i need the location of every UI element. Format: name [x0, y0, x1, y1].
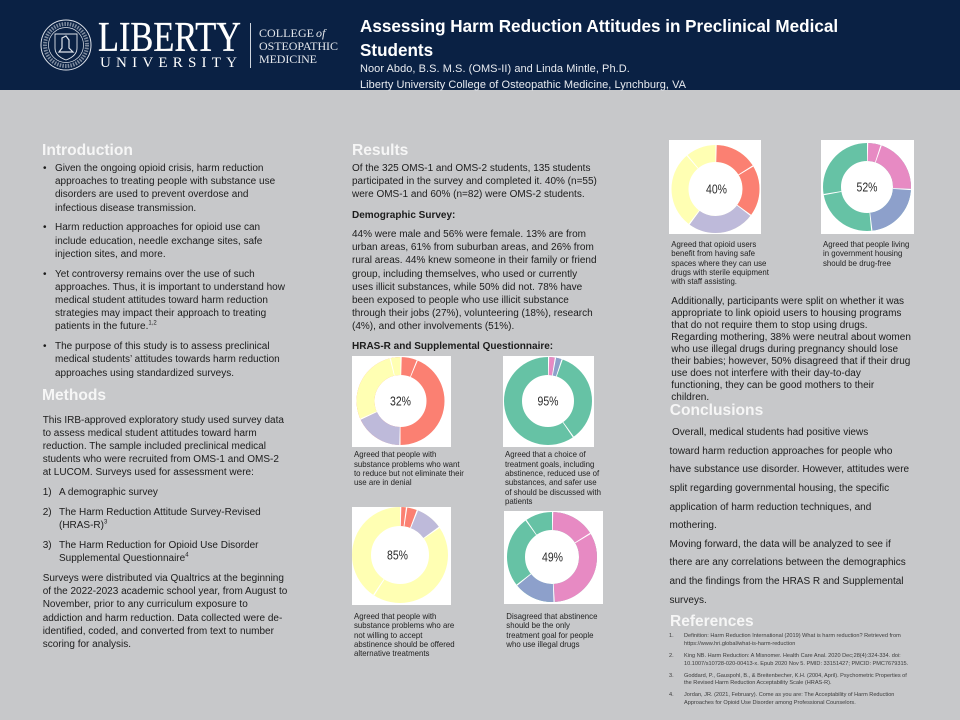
text block: references: 10.1007/s10728-020-00413-x. Epub 2020 Nov 5. PMID: 33151427; PMCID: PMC7679315. — [684, 661, 908, 667]
text block: methods: The Harm Reduction for Opioid Use Disorder — [59, 540, 259, 551]
caption: 32% chart — [354, 450, 464, 487]
text block: references — [669, 633, 908, 706]
poster title — [360, 17, 838, 60]
text block: methods: students who were recruited from OMS-1 and OMS-2 — [43, 454, 279, 465]
donut chart: 85%: 85% — [387, 548, 408, 562]
text block: conclusions — [670, 427, 909, 606]
caption: 85% chart: not willing to accept — [354, 631, 422, 640]
text block: introduction bullets: Given the ongoing opioid crisis, harm reduction — [55, 163, 263, 174]
text block: additional results: Additionally, participants were split on whether it was — [671, 296, 904, 307]
caption: 49% chart: should be the only — [506, 621, 570, 630]
authors and affiliation: Noor Abdo, B.S. M.S. (OMS-II) and Linda Mintle, Ph.D. — [360, 63, 630, 75]
caption: 95% chart: substances, and safer use — [505, 478, 597, 487]
caption: 52% chart: in government housing — [823, 249, 902, 258]
text block: references: King NB. Harm Reduction: A Misnomer. Health Care Anal. 2020 Dec;28(4):324-334. doi: — [684, 653, 901, 659]
text block: demographic survey: 44% were male and 56% were female. 13% are from — [352, 229, 586, 240]
text block: methods: scoring for analysis. — [43, 639, 131, 650]
text block: conclusions: application of harm reduction techniques, and — [670, 502, 871, 512]
donut chart: 85% — [352, 507, 451, 605]
donut chart: 49%: 49% — [542, 550, 563, 564]
authors and affiliation: Liberty University College of Osteopathic Medicine, Lynchburg, VA — [360, 79, 686, 91]
text block: results summary: Of the 325 OMS-1 and OMS-2 students, 135 students — [352, 163, 590, 174]
logo: Liberty University College of Osteopathic Medicine: OSTEOPATHIC — [259, 39, 338, 53]
caption: 40% chart: with staff assisting. — [671, 277, 737, 286]
caption: 85% chart: abstinence should be offered — [354, 640, 455, 649]
text block: methods: reduction. The sample included preclinical medical — [43, 441, 266, 452]
text block: additional results: children. — [671, 392, 709, 403]
logo: Liberty University College of Osteopathic Medicine — [40, 15, 338, 71]
text block: introduction bullets: • — [43, 269, 47, 280]
text block: introduction bullets: approaches. Thus, it is important to understand how — [55, 282, 285, 293]
caption: 40% chart — [671, 240, 769, 286]
text block: introduction bullets: • — [43, 163, 47, 174]
text block: conclusions: split regarding governmental housing, the specific — [670, 483, 889, 494]
donut chart: 52%: 52% — [856, 180, 878, 194]
text block: demographic survey — [352, 229, 597, 332]
text block: results summary: were OMS-1 and 60% (n=82) were OMS-2 students. — [352, 189, 585, 200]
donut chart: 95% — [503, 356, 594, 447]
text block: demographic survey: uses illicit substances, while 50% did not. 78% have — [352, 282, 582, 293]
caption: 52% chart: should be drug-free — [823, 259, 891, 268]
caption: 40% chart: Agreed that opioid users — [671, 240, 756, 249]
caption: 95% chart — [505, 450, 601, 506]
text block: demographic survey: been exposed to people who use illicit substance — [352, 295, 569, 306]
text block: conclusions: Overall, medical students had positive views — [672, 427, 868, 438]
text block: conclusions: Moving forward, the data will be analyzed to see if — [670, 539, 891, 550]
logo: Liberty University College of Osteopathic Medicine: UNIVERSITY — [100, 55, 237, 71]
caption: 49% chart: who use illegal drugs — [506, 640, 580, 649]
authors and affiliation — [360, 63, 686, 91]
text block: conclusions: mothering. — [670, 520, 717, 531]
text block: methods: 3) — [43, 540, 52, 551]
text block: methods: of the 2022-2023 academic school year, from August to — [43, 586, 287, 597]
caption: 52% chart: Agreed that people living — [823, 240, 909, 249]
text block: demographic survey: urban areas, 61% from suburban areas, and 26% from — [352, 242, 594, 253]
text block: introduction bullets: medical student attitudes toward harm reduction — [55, 295, 268, 306]
caption: 32% chart: use are in denial — [354, 478, 412, 487]
subheading: Demographic Survey: Demographic Survey: — [352, 210, 455, 221]
logo: Liberty University College of Osteopathic Medicine: LIBERTY — [98, 15, 241, 61]
text block: references: https://www.hri.global/what-is-harm-reduction — [684, 641, 795, 647]
text block: additional results: their babies; however, 50% disagreed that if their drug — [671, 356, 910, 367]
caption: 49% chart: treatment goal for people — [506, 631, 594, 640]
caption: 85% chart — [354, 612, 455, 658]
text block: introduction bullets: injection sites, and more. — [55, 249, 166, 260]
text block: introduction bullets: patients in the future.1,2 — [55, 321, 157, 332]
caption: 85% chart: Agreed that people with — [354, 612, 436, 621]
text block: methods: Supplemental Questionnaire4 — [59, 553, 189, 564]
text block: references: the Revised Harm Reduction Acceptability Scale (HRAS-R). — [684, 680, 832, 686]
text block: demographic survey: rural areas. 44% knew someone in their family or friend — [352, 255, 597, 266]
text block: methods: addiction and harm reduction. Data collected were de- — [43, 612, 282, 624]
text block: introduction bullets: infectious disease transmission. — [55, 203, 196, 214]
text block: demographic survey: (4%), and other involvements (51%). — [352, 321, 514, 332]
poster title: Assessing Harm Reduction Attitudes in Preclinical Medical — [360, 17, 838, 36]
caption: 40% chart: benefit from having safe — [671, 249, 755, 258]
caption: 95% chart: of should be discussed with — [505, 488, 601, 497]
text block: introduction bullets: Yet controversy remains over the use of such — [55, 269, 255, 280]
donut chart: 32%: 32% — [390, 394, 411, 408]
text block: additional results: use does not interfere with their day-to-day — [671, 368, 861, 379]
caption: 52% chart — [823, 240, 909, 268]
text block: references: Goddard, P., Gauspohl, B., & Breitenbecher, K.H. (2004, April). Psychometric Properties of — [684, 672, 907, 678]
header banner — [0, 0, 960, 90]
text block: conclusions: and the findings from the HRAS R and Supplemental — [670, 576, 904, 587]
text block: methods: at LUCOM. Surveys used for assessment were: — [43, 467, 254, 478]
text block: conclusions: there are any correlations between the demographics — [670, 557, 906, 568]
text block: additional results: functioning, they can be good mothers to their — [671, 380, 874, 391]
text block: methods: identified, coded, and converted from text to number — [43, 626, 274, 637]
caption: 95% chart: Agreed that a choice of — [505, 450, 586, 459]
donut chart: 32% — [352, 356, 451, 447]
text block: methods: (HRAS-R)3 — [59, 520, 107, 531]
text block: introduction bullets: include education, needle exchange sites, safe — [55, 236, 262, 247]
text block: methods — [42, 414, 287, 650]
text block: conclusions: toward harm reduction approaches for people who — [670, 446, 892, 457]
heading: References: References — [670, 613, 754, 630]
caption: 32% chart: to reduce but not eliminate their — [354, 469, 464, 478]
donut chart: 40% — [669, 140, 761, 234]
subheading: HRAS-R and Supplemental Questionnaire: HRAS-R and Supplemental Questionnaire: — [352, 341, 553, 352]
logo: Liberty University College of Osteopathic Medicine: MEDICINE — [259, 52, 317, 66]
poster title: Students — [360, 41, 433, 60]
text block: results summary: participated in the survey and completed it. 40% (n=55) — [352, 176, 597, 187]
text block: methods: 2) — [43, 507, 52, 518]
text block: references: Definition: Harm Reduction International (2019) What is harm reduction? Retrieved from — [684, 633, 901, 639]
icon: university seal — [41, 20, 91, 70]
text block: methods: The Harm Reduction Attitude Survey-Revised — [59, 507, 261, 518]
text block: conclusions: have substance use disorder. However, attitudes were — [670, 464, 909, 475]
text block: references: Approaches for Opioid Use Disorder among Professional Counselors. — [684, 700, 856, 706]
text block: introduction bullets: • — [43, 341, 47, 352]
text block: methods: 1) — [43, 487, 52, 498]
caption: 95% chart: treatment goals, including — [505, 460, 594, 469]
text block: introduction bullets: approaches using standardized surveys. — [55, 368, 234, 379]
heading: Conclusions: Conclusions — [670, 402, 763, 419]
text block: references: 3. — [669, 672, 674, 678]
text block: introduction bullets: approaches to treating people with substance use — [55, 176, 275, 187]
text block: introduction bullets: disorders are used to prevent overdose and — [55, 189, 248, 200]
donut chart: 49% — [504, 511, 603, 604]
text block: results summary — [352, 163, 597, 200]
logo: Liberty University College of Osteopathic Medicine: of — [316, 26, 327, 40]
text block: introduction bullets: strategies may impact their approach to treating — [55, 308, 266, 319]
heading: Results: Results — [352, 142, 408, 159]
text block: demographic survey: group, including themselves, who used or currently — [352, 269, 577, 280]
text block: additional results — [671, 296, 911, 403]
text block: references: Jordan, JR. (2021, February). Come as you are: The Acceptability of Harm Reduction — [684, 692, 894, 698]
caption: 49% chart — [506, 612, 598, 649]
text block: methods: to assess medical student attitudes toward harm — [43, 428, 257, 439]
text block: conclusions: surveys. — [670, 595, 707, 606]
donut chart: 40%: 40% — [706, 182, 727, 196]
text block: methods: Surveys were distributed via Qualtrics at the beginning — [43, 573, 284, 584]
logo: Liberty University College of Osteopathic Medicine: COLLEGE — [259, 26, 314, 40]
donut chart: 95%: 95% — [538, 394, 559, 408]
text block: demographic survey: through their jobs (27%), volunteering (18%), research — [352, 308, 593, 319]
heading: Introduction: Introduction — [42, 142, 133, 159]
text block: introduction bullets: medical students’ attitudes towards harm reduction — [55, 354, 280, 365]
text block: methods: November, prior to any curriculum exposure to — [43, 599, 248, 610]
donut chart: 52% — [821, 140, 914, 234]
caption: 40% chart: spaces where they can use — [671, 259, 766, 268]
text block: introduction bullets: The purpose of this study is to assess preclinical — [55, 341, 270, 352]
text block: additional results: that do not require them to stop using drugs. — [671, 320, 868, 331]
text block: introduction bullets: • — [43, 222, 47, 233]
caption: 95% chart: abstinence, reduced use of — [505, 469, 599, 478]
text block: additional results: Regarding mothering, 38% were neutral about women — [671, 332, 911, 343]
text block: references: 1. — [669, 633, 674, 639]
text block: methods: A demographic survey — [59, 487, 158, 498]
caption: 32% chart: Agreed that people with — [354, 450, 436, 459]
caption: 85% chart: substance problems who are — [354, 621, 454, 630]
text block: additional results: who use illegal drugs during pregnancy should lose — [671, 344, 898, 355]
caption: 49% chart: Disagreed that abstinence — [506, 612, 597, 621]
caption: 40% chart: drugs with sterile equipment — [671, 268, 769, 277]
text block: introduction bullets: Harm reduction approaches for opioid use can — [55, 222, 260, 233]
text block: methods: This IRB-approved exploratory study used survey data — [43, 414, 284, 426]
text block: references: 2. — [669, 653, 674, 659]
text block: additional results: appropriate to link opioid users to housing programs — [671, 308, 901, 319]
text block: references: 4. — [669, 692, 674, 698]
heading: Methods: Methods — [42, 387, 106, 404]
caption: 32% chart: substance problems who want — [354, 460, 460, 469]
text block: introduction bullets — [43, 163, 285, 379]
caption: 95% chart: patients — [505, 497, 532, 506]
caption: 85% chart: alternative treatments — [354, 649, 429, 658]
